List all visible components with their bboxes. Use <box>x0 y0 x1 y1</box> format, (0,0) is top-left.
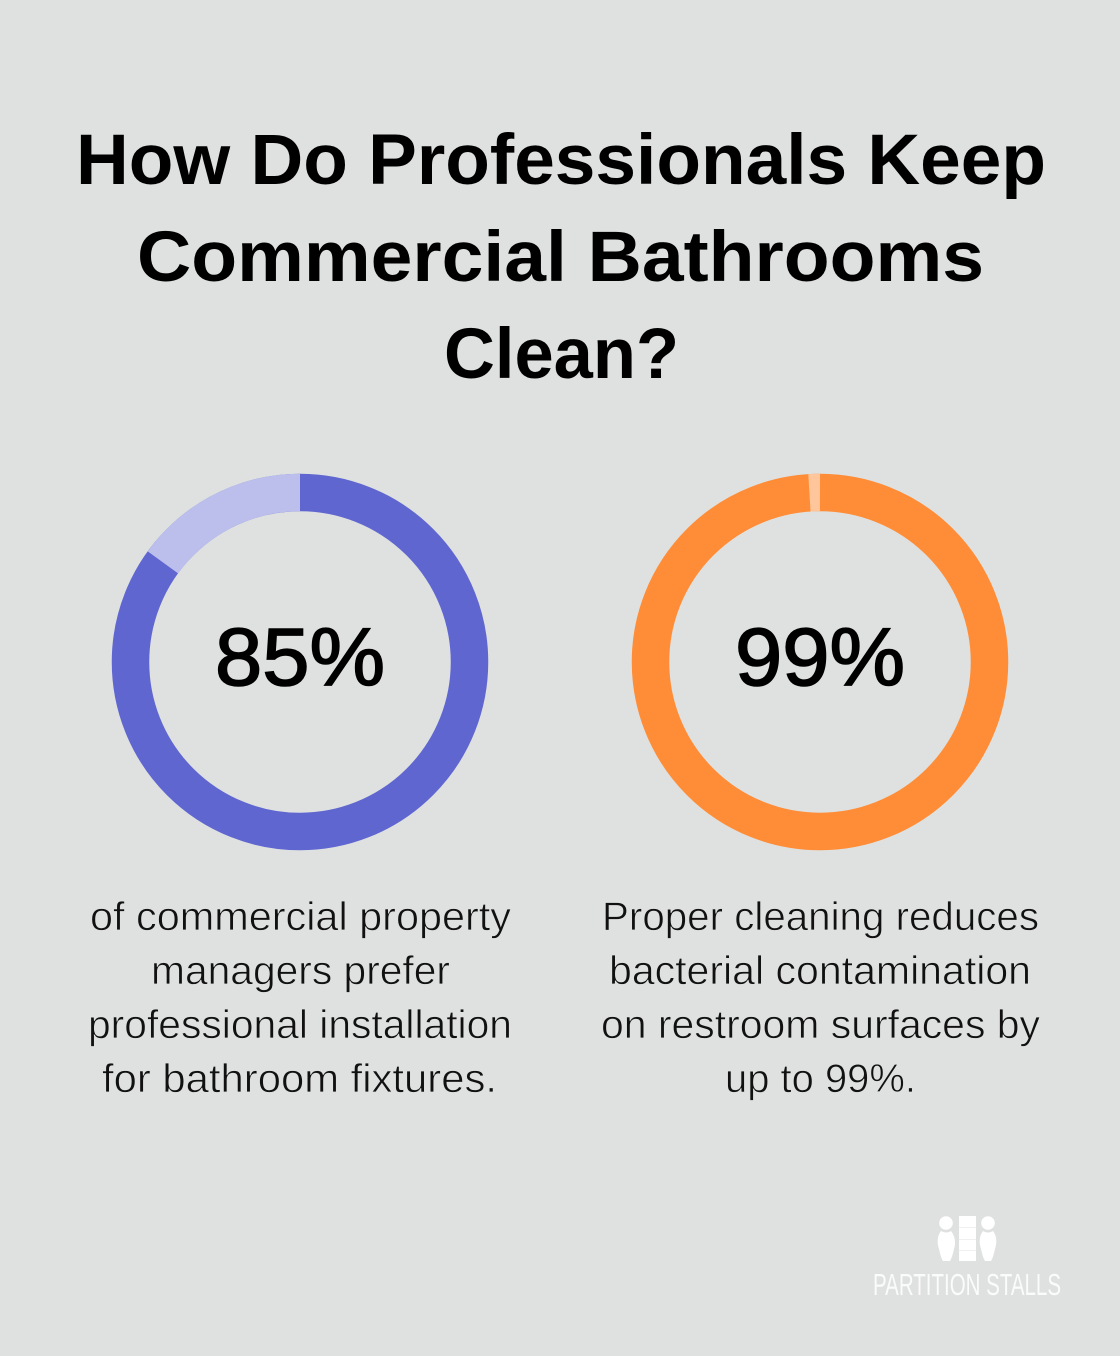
icon: right person <box>980 1216 996 1261</box>
description: property managers: of commercial property <box>90 895 511 939</box>
panel: 99% statistic <box>601 492 1040 1101</box>
donut chart: 85% <box>130 492 470 832</box>
description: bacterial contamination: up to 99%. <box>725 1057 916 1101</box>
description: property managers <box>88 895 512 1101</box>
description: property managers: for bathroom fixtures. <box>102 1057 497 1101</box>
title <box>76 121 1046 394</box>
value: 85%: 85% <box>215 612 385 703</box>
donut chart: 99% <box>650 492 990 832</box>
value: 99%: 99% <box>735 612 905 703</box>
panel: 85% statistic <box>88 492 512 1101</box>
description: bacterial contamination <box>601 895 1040 1101</box>
icon: left person <box>938 1216 955 1261</box>
logo: Partition Stalls <box>873 1216 1061 1302</box>
title: Commercial Bathrooms <box>137 218 984 297</box>
icon: partition stall <box>959 1216 976 1261</box>
description: property managers: managers prefer <box>151 949 450 993</box>
title: How Do Professionals Keep <box>76 121 1046 200</box>
title: Clean? <box>444 315 679 394</box>
description: property managers: professional installation <box>88 1003 512 1047</box>
description: bacterial contamination: bacterial contamination <box>609 949 1031 993</box>
description: bacterial contamination: Proper cleaning reduces <box>602 895 1039 939</box>
description: bacterial contamination: on restroom surfaces by <box>601 1003 1040 1047</box>
